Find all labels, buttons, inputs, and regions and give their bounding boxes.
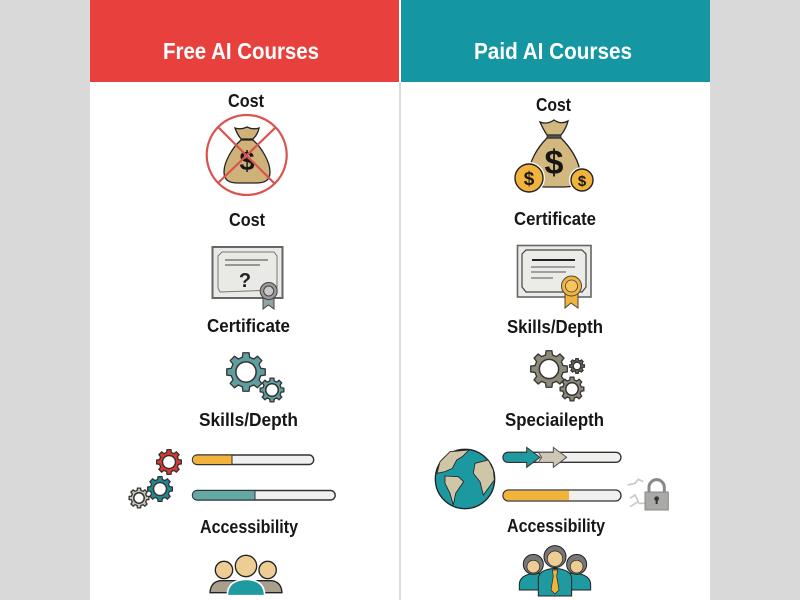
- label: free second cost: Cost: [229, 210, 265, 230]
- icon: money bag with coins: $: [578, 173, 587, 190]
- label: free skills: Skills/Depth: [199, 410, 298, 430]
- icon: money bag with coins: [513, 120, 595, 194]
- label: paid accessibility: Accessibility: [507, 516, 605, 536]
- heading: free: Free AI Courses: [163, 38, 319, 64]
- icon: padlock: [628, 479, 668, 510]
- label: free certificate: Certificate: [207, 316, 290, 336]
- icon: money bag with coins: $: [545, 144, 564, 182]
- icon: money bag with coins: $: [524, 169, 535, 190]
- chart: free progress bar two: [192, 490, 335, 500]
- label: paid skills: Skills/Depth: [507, 317, 603, 337]
- label: paid certificate: Certificate: [514, 209, 596, 229]
- heading: paid: Paid AI Courses: [474, 38, 632, 64]
- icon: globe: [435, 449, 495, 509]
- panel: free header: [90, 0, 399, 82]
- chart: paid arrow progress bar: [503, 447, 621, 467]
- icon: taupe gears: [531, 351, 584, 401]
- icon: paid business people: [519, 546, 591, 596]
- icon: free people group: [210, 555, 282, 596]
- panel: paid header: [401, 0, 710, 82]
- label: paid specialization: Speciailepth: [505, 410, 604, 430]
- chart: free progress bar one: [192, 455, 314, 464]
- label: paid cost: Cost: [536, 95, 571, 115]
- chart: paid progress bar: [503, 490, 621, 501]
- label: free accessibility: Accessibility: [200, 517, 298, 537]
- icon: certificate with gold seal: [518, 246, 591, 308]
- panel: white comparison sheet: [90, 0, 710, 600]
- icon: certificate with question mark: ?: [239, 270, 251, 292]
- icon: certificate with question mark: [212, 247, 282, 309]
- icon: crossed out money bag: [207, 115, 287, 195]
- icon: small gears: [129, 450, 181, 508]
- label: free cost: Cost: [228, 91, 264, 111]
- icon: teal gears: [227, 353, 284, 402]
- icon: crossed out money bag: $: [239, 146, 255, 176]
